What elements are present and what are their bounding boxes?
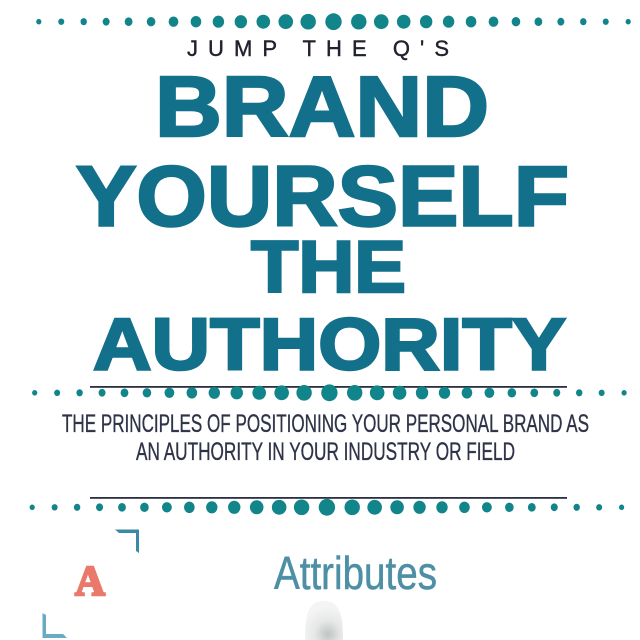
main title [76,60,569,386]
second dotted divider [32,384,627,401]
icon: letter A: A [75,559,106,605]
corner bracket: bottom left [42,613,67,638]
heading: Attributes: Attributes [274,547,437,599]
upper rule [90,386,567,388]
corner bracket: top right [115,530,139,553]
main title: AUTHORITY [93,304,566,386]
kicker: Jump the Q's: JUMP THE Q'S [187,36,449,61]
third dotted divider [30,499,624,516]
top dotted divider [36,13,631,30]
main title: YOURSELF [76,150,569,244]
lower rule [90,497,567,499]
subtitle [62,410,589,466]
main title: THE [251,227,406,308]
main title: BRAND [155,60,489,155]
icon: light bulb [305,601,343,640]
